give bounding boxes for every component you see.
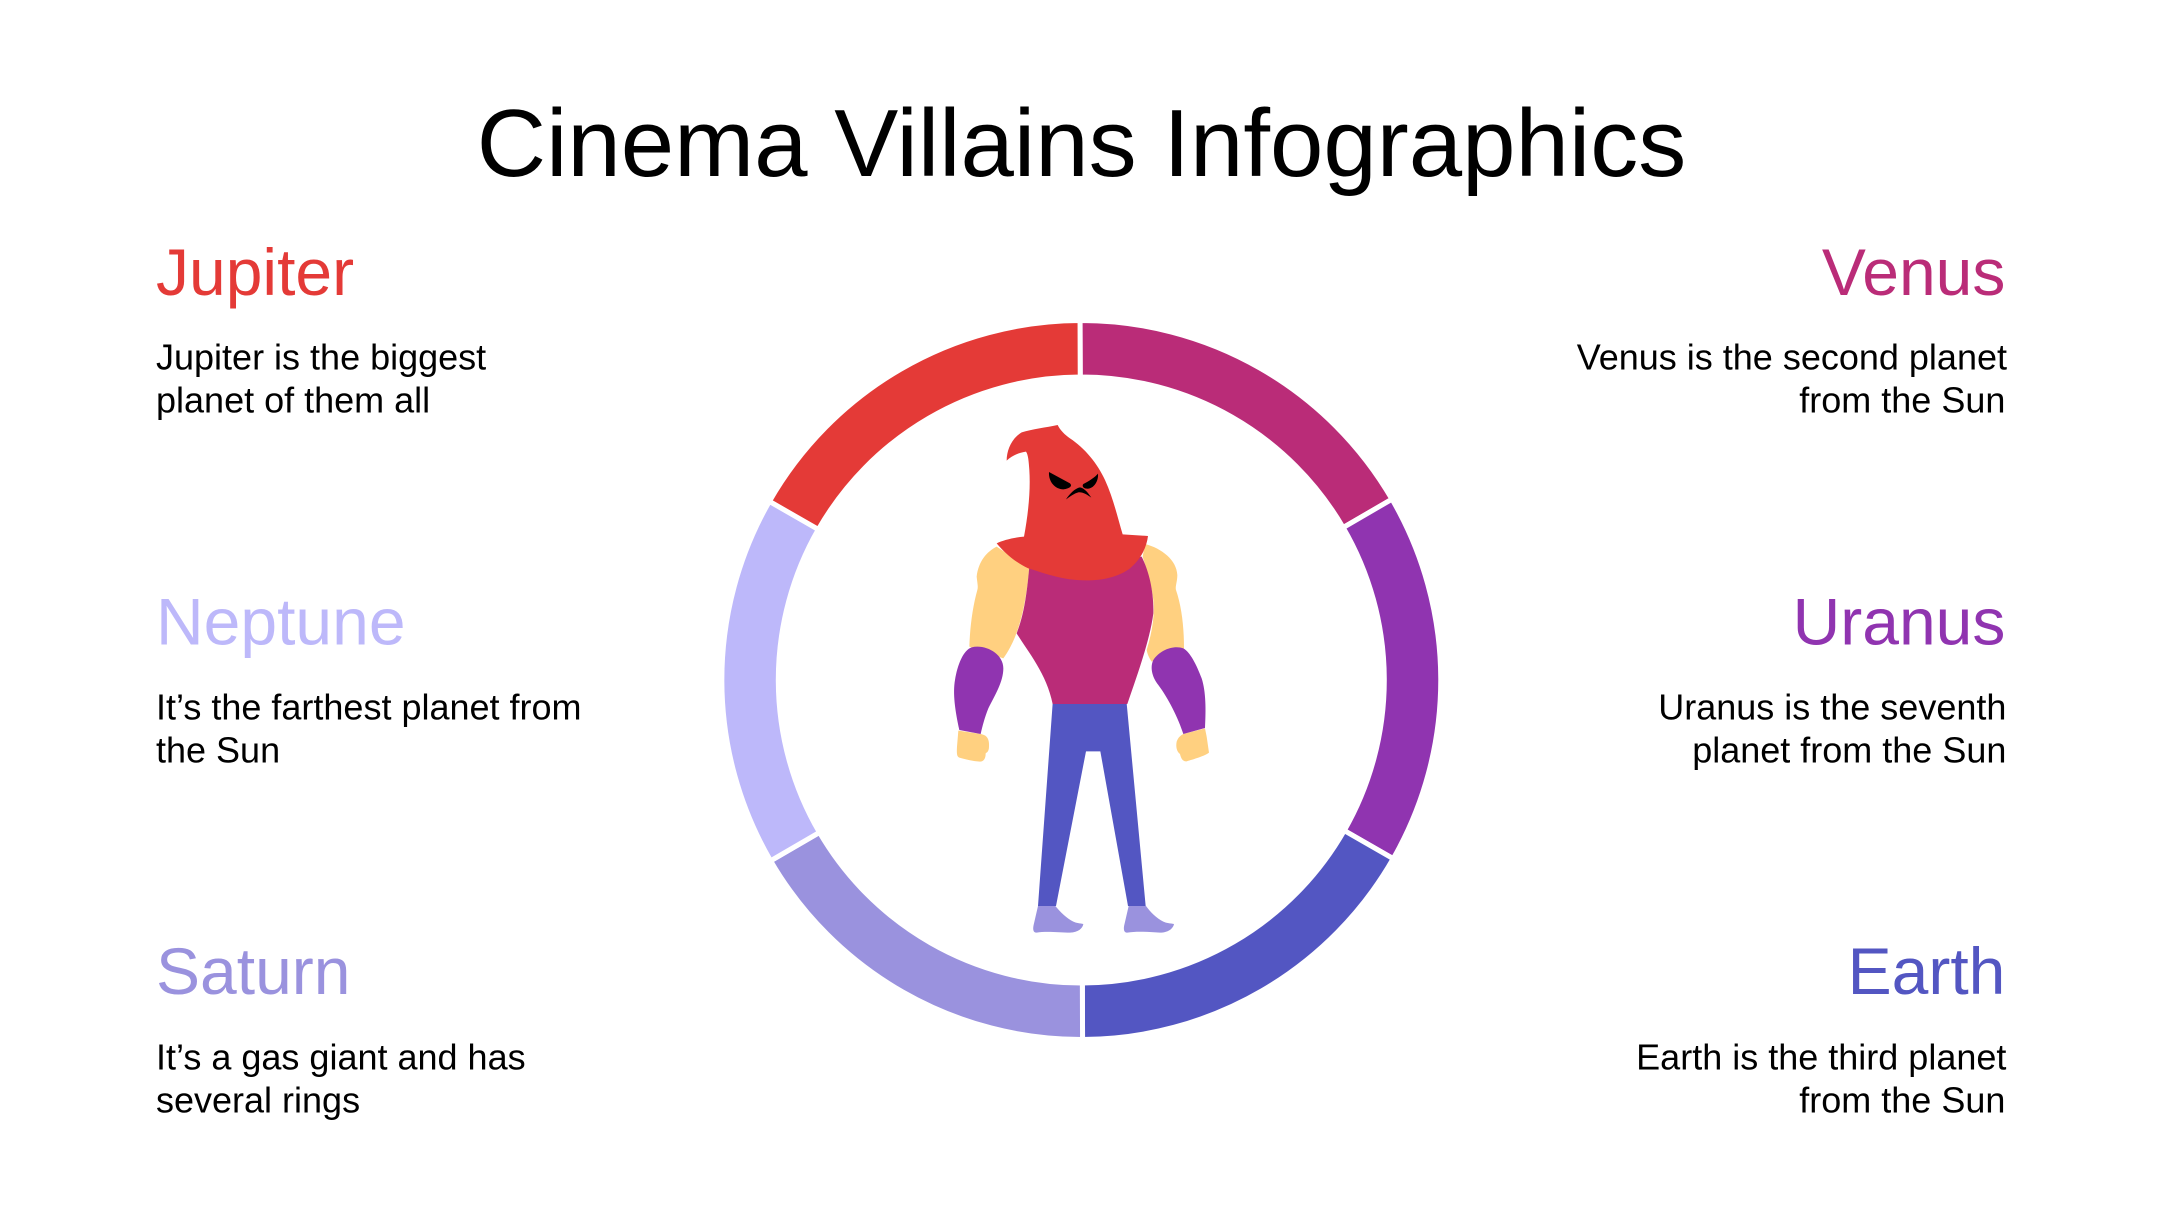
ring segment: Saturn xyxy=(771,831,1083,1041)
right fist xyxy=(1176,728,1209,761)
ring segment: Venus xyxy=(1080,319,1392,529)
right shoe xyxy=(1124,906,1174,933)
right bracer xyxy=(1152,647,1206,734)
text: Earth description: Earth is the third planet xyxy=(1636,1036,2006,1077)
panel: Uranus xyxy=(1658,584,2006,771)
text: Neptune description: the Sun xyxy=(156,730,280,771)
left shoe xyxy=(1033,906,1083,933)
villain upper body xyxy=(969,425,1184,704)
ring chart xyxy=(721,319,1442,1041)
heading: Jupiter: Jupiter xyxy=(156,235,354,309)
panel: Saturn xyxy=(156,934,526,1120)
icon: hooded villain figure xyxy=(954,425,1209,933)
heading: Earth: Earth xyxy=(1848,934,2005,1008)
heading: Uranus: Uranus xyxy=(1793,584,2005,658)
right eye xyxy=(1083,474,1098,489)
torso xyxy=(1017,557,1153,704)
ring segment: Uranus xyxy=(1343,499,1441,859)
hood xyxy=(997,425,1148,580)
text: Saturn description: It’s a gas giant and has xyxy=(156,1036,526,1077)
panel: Earth xyxy=(1636,934,2006,1120)
heading: Venus: Venus xyxy=(1822,235,2005,309)
text: Venus description: from the Sun xyxy=(1799,380,2005,421)
text: Jupiter description: planet of them all xyxy=(156,380,430,421)
left eye xyxy=(1049,472,1071,489)
ring segment: Earth xyxy=(1082,830,1394,1039)
villain lower body xyxy=(957,703,1209,933)
title: Cinema Villains Infographics xyxy=(477,90,1686,197)
heading: Neptune: Neptune xyxy=(156,584,406,658)
text: Jupiter description: Jupiter is the biggest xyxy=(156,337,486,378)
panel: Neptune xyxy=(156,584,582,771)
frown xyxy=(1066,487,1091,499)
text: Uranus description: planet from the Sun xyxy=(1692,730,2006,771)
panel: Venus xyxy=(1577,235,2007,421)
left fist xyxy=(957,731,989,762)
text: Earth description: from the Sun xyxy=(1799,1079,2005,1120)
trousers xyxy=(1038,703,1146,906)
text: Neptune description: It’s the farthest planet from xyxy=(156,687,582,728)
text: Uranus description: Uranus is the seventh xyxy=(1658,687,2006,728)
text: Venus description: Venus is the second planet xyxy=(1577,337,2007,378)
panel: Jupiter xyxy=(156,235,486,421)
ring segment: Neptune xyxy=(721,501,820,861)
right upper arm xyxy=(1143,544,1184,662)
left bracer xyxy=(954,647,1003,734)
ring segment: Jupiter xyxy=(769,321,1081,530)
heading: Saturn: Saturn xyxy=(156,934,350,1008)
left upper arm xyxy=(969,547,1029,658)
text: Saturn description: several rings xyxy=(156,1079,360,1120)
